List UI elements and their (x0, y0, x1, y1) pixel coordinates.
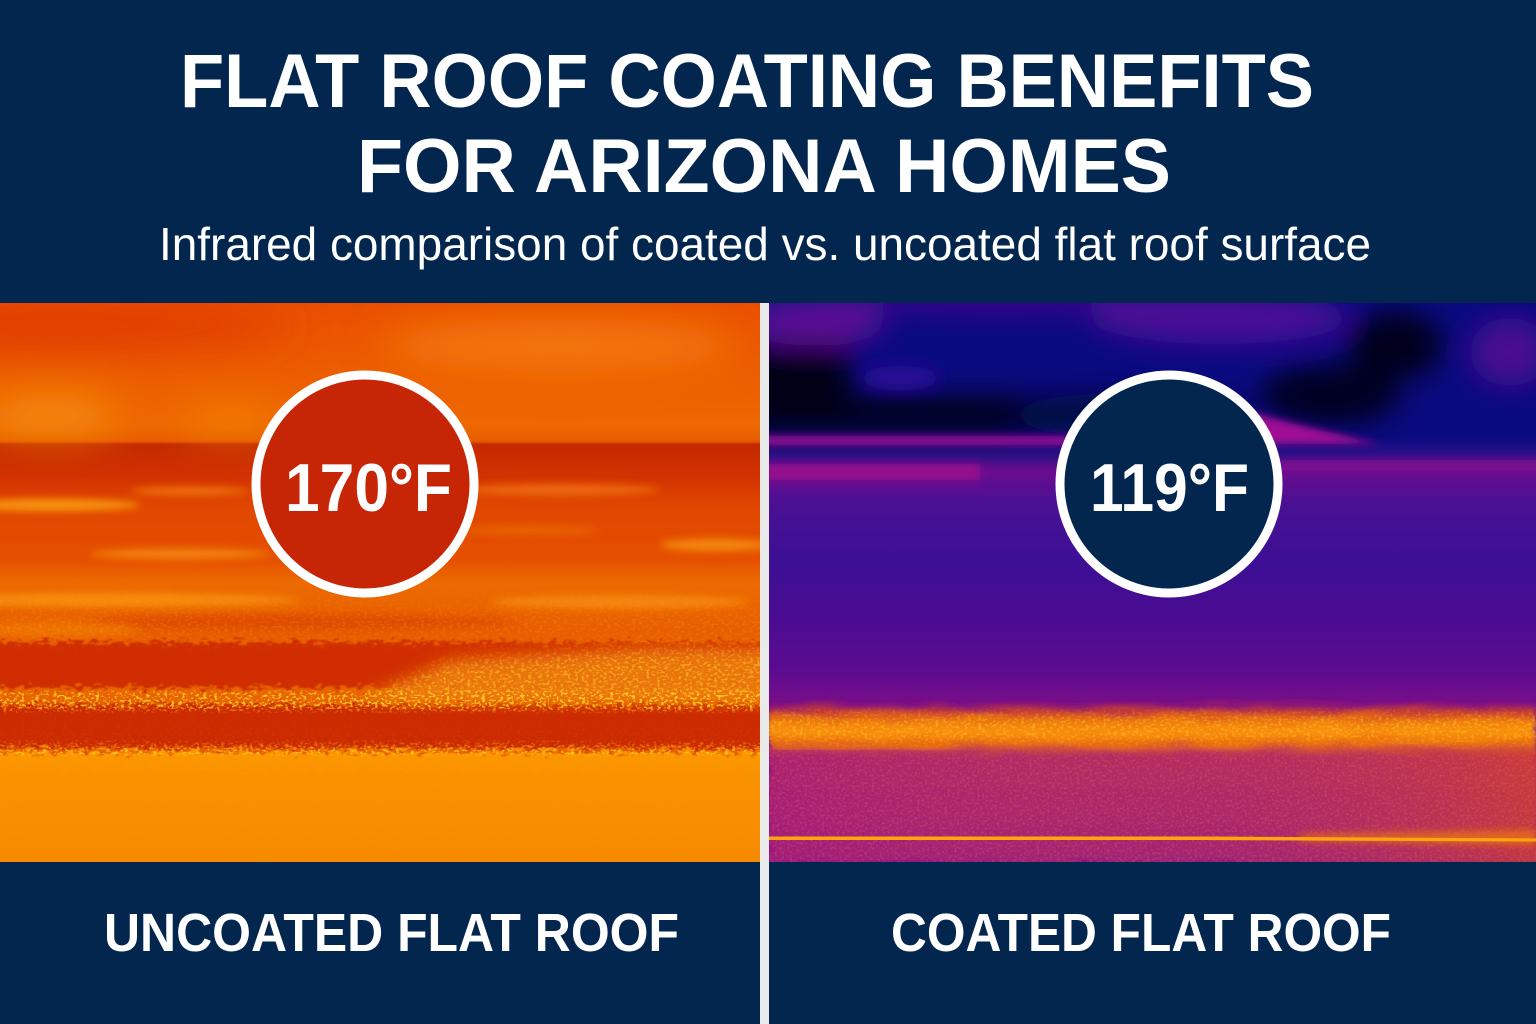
hot line (1300, 830, 1536, 845)
panel: uncoated thermal image (0, 297, 800, 872)
label: uncoated flat roof: UNCOATED FLAT ROOF (104, 903, 679, 963)
badge: 170°F uncoated temperature: 170°F (285, 450, 452, 526)
label: coated flat roof: COATED FLAT ROOF (891, 903, 1391, 963)
badge: 119°F coated temperature: 119°F (1090, 450, 1249, 526)
title: FLAT ROOF COATING BENEFITS (180, 39, 1314, 124)
title (180, 39, 1314, 209)
subtitle: Infrared comparison of coated vs. uncoated flat roof surface (159, 218, 1371, 270)
badge: 119°F coated temperature (1060, 375, 1278, 593)
title: FOR ARIZONA HOMES (357, 124, 1171, 209)
divider (760, 303, 769, 1024)
badge: 170°F uncoated temperature (256, 375, 474, 593)
ragged red bands (0, 642, 800, 872)
panel: coated thermal image (720, 292, 1536, 862)
